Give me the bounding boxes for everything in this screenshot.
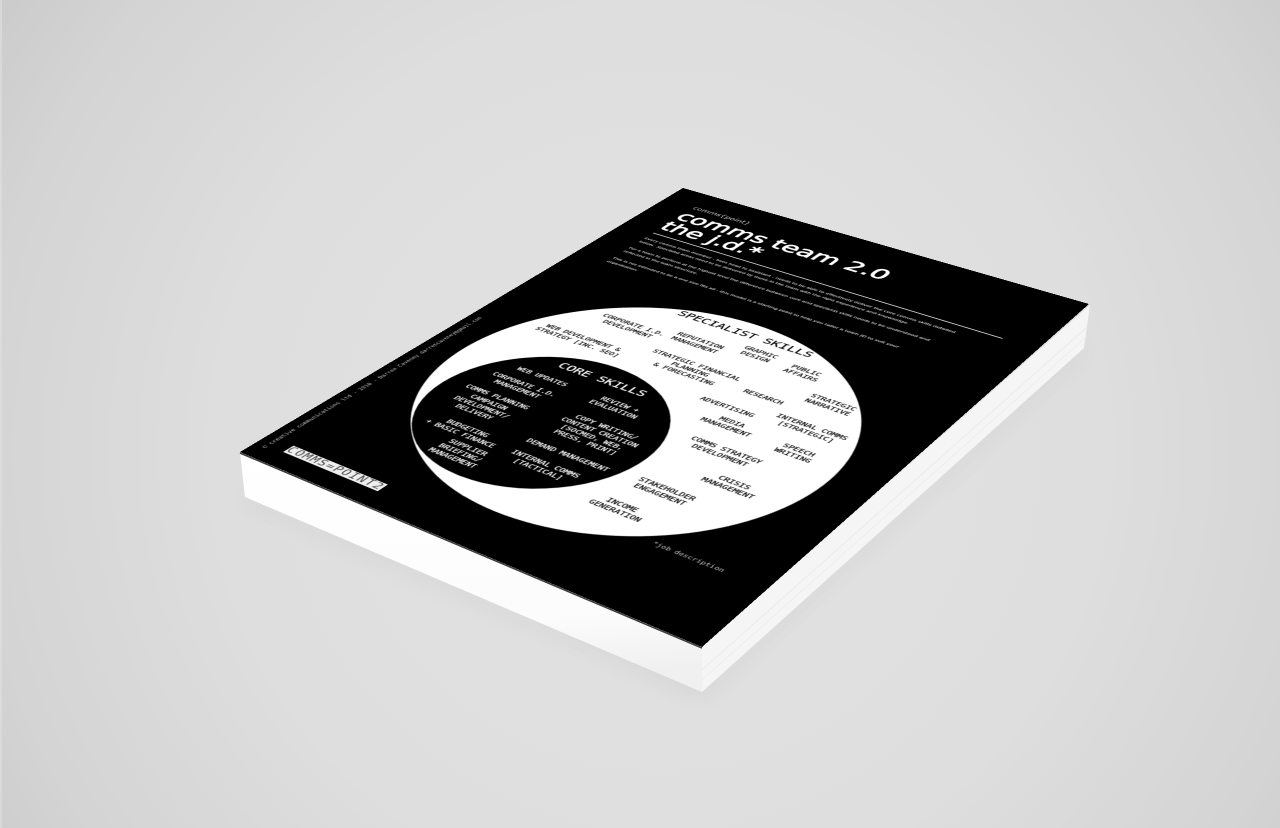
footnote: *job description [650,541,726,574]
skill: web updates: WEB UPDATES [515,366,570,387]
skill: internal comms strategic: [STRATEGIC] [775,420,836,444]
intro paragraph 2: reflected in the team structure. [622,250,700,275]
skill: stakeholder engagement: STAKEHOLDER [636,476,698,502]
skill: review evaluation: EVALUATION [587,399,639,420]
skill: strategic narrative: NARRATIVE [803,398,852,417]
skill: reputation management: REPUTATION [675,331,726,350]
poster bottom edge line [240,453,702,648]
skill: campaign development: DELIVERY [453,403,495,421]
skill: stakeholder engagement: ENGAGEMENT [631,483,688,507]
skill: strategic financial planning: & FORECASTING [651,362,717,386]
intro paragraph 2: For a team to perform at the highest level the difference between core and specialist skills needs to be understood and [627,246,932,342]
logo: COMMS=POINT2 [283,446,388,491]
skill: review evaluation [411,396,641,448]
skill: copy writing [411,414,672,456]
stack: front face [240,452,702,692]
skill: strategic financial planning: PLANNING [669,361,711,378]
skill: internal comms tactical: INTERNAL COMMS [509,449,582,479]
skill: supplier briefing: SUPPLIER [446,438,490,457]
brand line: comms{point} [691,206,753,226]
skill: graphic design: GRAPHIC [742,345,780,360]
skill: budgeting: BUDGETING [444,419,491,439]
skill: internal comms strategic: INTERNAL COMMS [774,413,850,442]
stack: right face [702,305,1090,692]
intro paragraph 1: below. Specialist areas need to be delivered by those in the team with the right experience and knowledge. [638,240,911,325]
copyright line: © creative communications ltd - 2018 - Darren Caveney darrencaveney@gmail.com [260,316,483,449]
heading: specialist skills: SPECIALIST SKILLS [674,309,817,359]
skill: strategic narrative: STRATEGIC [809,393,858,412]
heading: core skills: CORE SKILLS [554,361,651,399]
intro paragraph 1: Every comms team member - from head to assistant - needs to be able to effectively deliver the core comms skills detailed [643,237,957,334]
skill: crisis management: MANAGEMENT [699,476,756,500]
skill: copy writing: COPY WRITING/ [573,414,640,441]
skill: demand management: DEMAND MANAGEMENT [524,437,611,473]
skill: public affairs: PUBLIC [789,364,823,378]
skill: advertising: ADVERTISING [698,396,757,418]
poster: comms team 2.0 the j.d. [240,188,1089,647]
skill: graphic design: DESIGN [738,350,772,363]
skill: campaign development: CAMPAIGN [468,394,510,411]
skill: campaign development: DEVELOPMENT/ [452,395,512,419]
skill: web development: WEB DEVELOPMENT & [544,323,623,352]
divider [653,233,1003,339]
skill: supplier briefing: BRIEFING/ [436,442,484,463]
skill: crisis management: CRISIS [716,475,753,491]
skill: supplier briefing: MANAGEMENT [426,446,479,469]
title: the j.d.* [654,219,769,260]
skill: web development: STRATEGY [INC. SEO] [533,326,621,358]
skill: supplier briefing [411,429,490,469]
skill: corporate id development: CORPORATE I.D. [601,313,667,337]
inner circle: core skills [358,334,720,518]
skill: copy writing: [SOCMED, WEB, [558,424,626,451]
skill: comms strategy development: COMMS STRATEGY [689,436,764,465]
outer circle: specialist skills [316,271,942,593]
skill: comms strategy development: DEVELOPMENT [689,443,750,468]
skill: reputation management: MANAGEMENT [669,336,720,355]
skill: media management: MANAGEMENT [698,416,753,438]
skill: copy writing: PRESS, PRINT] [551,429,619,456]
intro paragraph 3: organisation. [605,260,640,272]
skill: budgeting: + BASIC FINANCE [423,418,497,449]
skill: review evaluation: REVIEW + [598,396,641,413]
intro paragraph 3: This is not intended to be a one size fits all - this model is a starting point to help you tailor a team JD to suit your [611,256,901,349]
skill: speech writing: SPEECH [781,443,817,458]
skill: corporate id development: DEVELOPMENT [601,319,654,339]
skill: research: RESEARCH [741,388,785,406]
skill: internal comms tactical [411,420,672,486]
skill: speech writing: WRITING [772,447,813,464]
skill: copy writing: CONTENT CREATION [559,416,640,449]
skill: media management: MEDIA [717,416,747,429]
skill: income generation: INCOME [604,497,640,514]
title: comms team 2.0 [670,209,897,283]
skill: strategic financial planning: STRATEGIC FINANCIAL [651,348,743,382]
skill: internal comms tactical: [TACTICAL] [511,458,565,481]
skill: public affairs: AFFAIRS [781,368,820,383]
skill: comms planning: COMMS PLANNING [463,383,532,411]
skill: income generation: GENERATION [586,498,643,523]
skill: corporate id management: CORPORATE I.D. [490,371,558,398]
skill: corporate id management: MANAGEMENT [492,379,542,399]
